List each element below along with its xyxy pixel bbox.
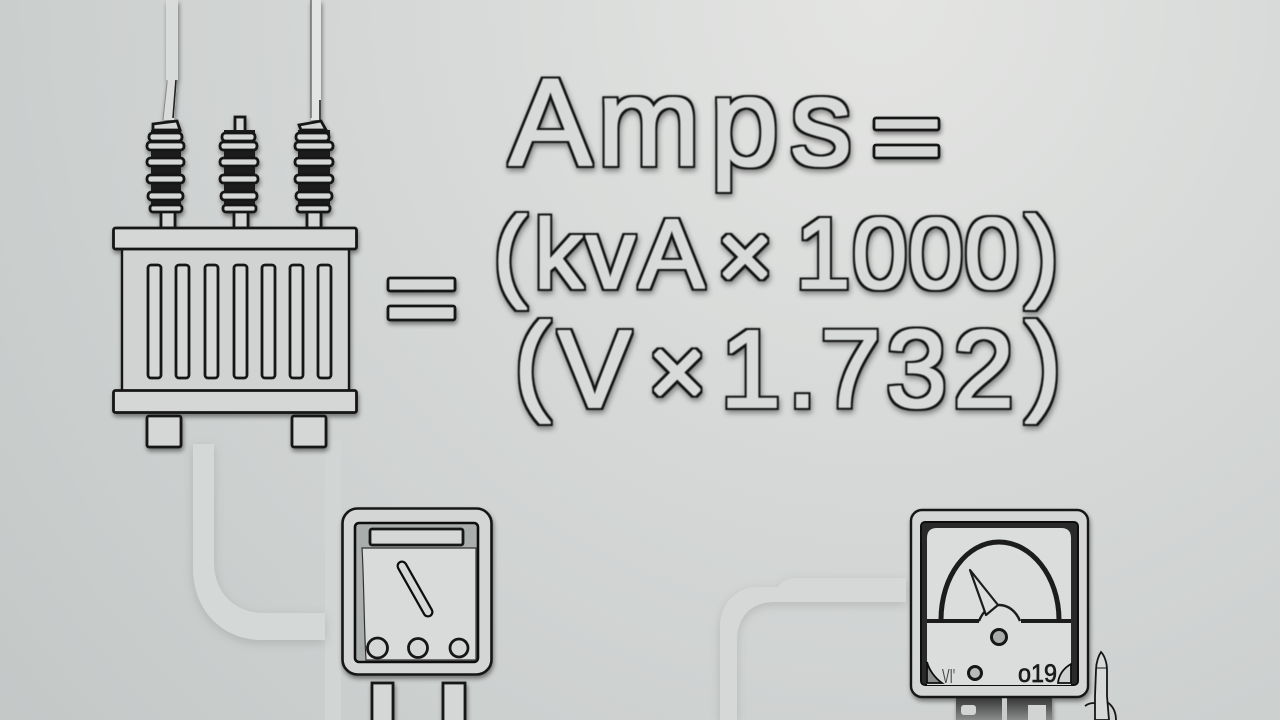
right wire	[311, 0, 321, 120]
small terminal	[968, 666, 982, 680]
left wire	[163, 0, 178, 120]
denominator: (V × 1.732)	[514, 301, 1062, 431]
label bar	[370, 529, 463, 545]
cooling fins	[148, 265, 331, 378]
meter terminals	[368, 638, 468, 658]
pivot hump	[979, 605, 1020, 621]
meter housing	[911, 510, 1088, 697]
pivot	[992, 630, 1006, 644]
left equals sign	[388, 278, 455, 320]
dial needle	[970, 570, 998, 615]
transformer	[114, 0, 356, 447]
denominator: (V × 1.732): )	[1025, 301, 1062, 424]
dial base line	[927, 619, 1071, 623]
meter feet	[956, 697, 1052, 720]
scale label right: o19	[1018, 660, 1057, 688]
meter window	[355, 523, 478, 662]
top plate	[114, 228, 356, 249]
left conduit	[193, 444, 325, 640]
formula	[493, 54, 1062, 431]
dial arc	[941, 542, 1059, 620]
heading equals sign	[874, 118, 939, 158]
probe icon	[1085, 652, 1116, 720]
scale label left: VI'	[942, 666, 955, 688]
meter window	[921, 522, 1078, 685]
denominator: (V × 1.732): ×	[648, 316, 706, 428]
meter legs	[372, 683, 465, 720]
numerator: (kvA × 1000): ×	[717, 203, 773, 310]
meter needle	[402, 566, 428, 612]
left foot	[147, 416, 181, 447]
numerator: (kvA × 1000): )	[1025, 196, 1059, 310]
center bushing	[220, 117, 258, 228]
right meter	[911, 510, 1088, 720]
meter face	[927, 528, 1071, 685]
heading: Amps: Amps	[509, 54, 852, 192]
left bushing	[147, 121, 184, 228]
vertical wall band	[325, 440, 341, 720]
denominator: (V × 1.732): 1.732	[720, 308, 1014, 431]
denominator: (V × 1.732): (	[514, 301, 551, 424]
meter face	[362, 548, 476, 660]
right conduit	[720, 578, 906, 720]
numerator: (kvA × 1000): (	[493, 196, 527, 310]
numerator: (kvA × 1000): kvA	[534, 199, 705, 309]
right foot	[292, 416, 326, 447]
meter housing	[342, 508, 492, 674]
numerator: (kvA × 1000)	[493, 196, 1059, 310]
right bushing	[295, 121, 333, 228]
bottom plate	[114, 390, 356, 412]
transformer body	[122, 249, 349, 391]
denominator: (V × 1.732): V	[558, 308, 631, 431]
left meter	[342, 508, 492, 720]
corner swooshes	[927, 662, 1071, 683]
numerator: (kvA × 1000): 1000	[795, 198, 1020, 310]
